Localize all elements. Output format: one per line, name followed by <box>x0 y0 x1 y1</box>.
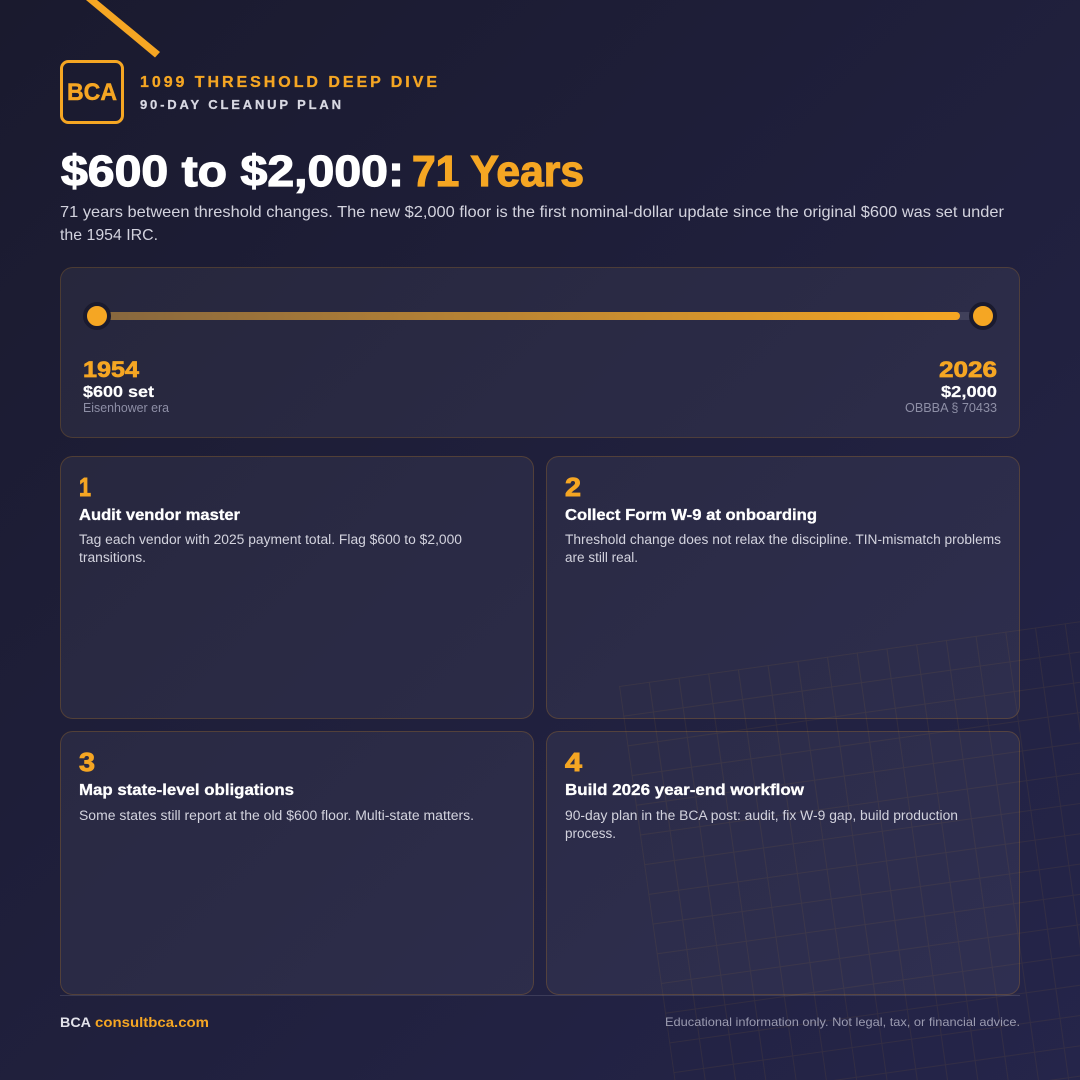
step body: 90-day plan in the BCA post: audit, fix W-9 gap, build production <box>565 808 958 823</box>
footer brand: consultbca.com <box>95 1014 209 1030</box>
step number: 3 <box>79 747 95 777</box>
step body: Threshold change does not relax the discipline. TIN-mismatch problems <box>565 532 1001 547</box>
logo badge: BCA <box>67 79 117 106</box>
footer disclaimer: Educational information only. Not legal, tax, or financial advice. <box>665 1015 1020 1029</box>
step heading: Audit vendor master <box>79 507 240 524</box>
step number: 4 <box>565 747 583 777</box>
timeline progress bar <box>97 312 960 320</box>
eyebrow: 1099 THRESHOLD DEEP DIVE <box>140 74 437 91</box>
marker: 1954 <box>85 304 109 328</box>
description: 71 years between threshold changes. The new $2,000 floor is the first nominal-dollar update since the original $600 was set under <box>60 204 1005 221</box>
label: 2026 <box>905 357 997 415</box>
header <box>62 62 437 122</box>
step body: process. <box>565 826 616 841</box>
step body: Some states still report at the old $600 floor. Multi-state matters. <box>79 808 474 823</box>
step heading: Map state-level obligations <box>79 782 294 799</box>
logo badge <box>62 62 122 122</box>
step number: 2 <box>565 472 581 502</box>
description <box>60 204 1005 244</box>
step body <box>79 532 462 565</box>
panel: step 3 <box>60 732 534 994</box>
step number: 1 <box>79 472 91 502</box>
marker: 2026 <box>971 304 995 328</box>
label: 1954: 1954 <box>83 357 140 382</box>
footer brand: BCA <box>60 1014 91 1030</box>
title: $600 to $2,000: <box>61 147 404 196</box>
title <box>61 147 584 196</box>
step body: transitions. <box>79 550 146 565</box>
label: 2026: 2026 <box>939 357 997 382</box>
label: 1954: $600 set <box>83 384 154 401</box>
step heading: Build 2026 year-end workflow <box>565 782 805 799</box>
step body <box>565 532 1001 565</box>
label: 2026: OBBBA § 70433 <box>905 401 997 415</box>
label: 1954: Eisenhower era <box>83 401 169 415</box>
panel: step 2 <box>546 456 1020 718</box>
step heading: Collect Form W-9 at onboarding <box>565 507 817 524</box>
timeline track <box>97 312 983 320</box>
description: the 1954 IRC. <box>60 227 158 244</box>
step body: are still real. <box>565 550 638 565</box>
label: 1954 <box>83 357 169 415</box>
accent diagonal stripe <box>86 0 160 58</box>
footer divider <box>60 995 1020 996</box>
step body: Tag each vendor with 2025 payment total. Flag $600 to $2,000 <box>79 532 462 547</box>
panel: timeline <box>60 268 1020 438</box>
label: 2026: $2,000 <box>941 384 997 401</box>
subheading: 90-DAY CLEANUP PLAN <box>140 97 341 112</box>
panel: step 1 <box>60 456 534 718</box>
decorative rotated grid <box>619 621 1080 1080</box>
panel: step 4 <box>546 732 1020 994</box>
title: 71 Years <box>412 147 584 196</box>
step body <box>565 808 958 841</box>
